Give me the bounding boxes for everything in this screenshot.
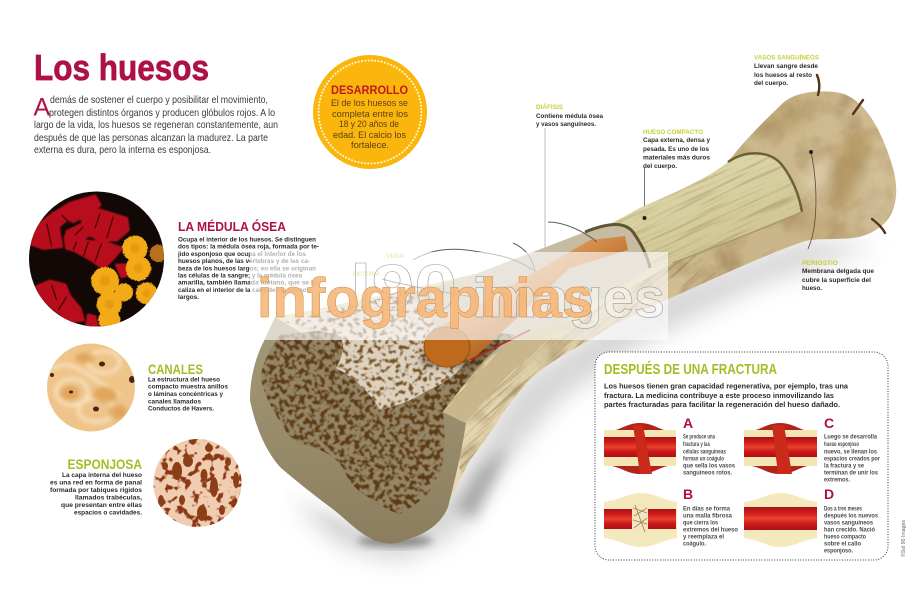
- label: periostio: hueso.: [802, 285, 822, 292]
- panel intro: Los huesos tienen gran capacidad regenerativa, por ejemplo, tras una: [604, 382, 849, 390]
- step C: la fractura y se: [824, 462, 865, 470]
- section: la medula osea: [177, 219, 319, 301]
- blood vessels: vein and artery: [382, 222, 597, 298]
- step B: B: [683, 486, 693, 502]
- intro text block: externa es dura, pero la interna es esponjosa.: [34, 145, 211, 156]
- label: periostio: cubre la superficie del: [802, 277, 871, 284]
- bone outer surface: [250, 91, 896, 542]
- body text: jido esponjoso que ocupa el interior de los: [177, 251, 306, 258]
- label: diafisis: Contiene médula ósea: [536, 113, 603, 120]
- body text: La estructura del hueso: [148, 376, 220, 384]
- step A: forman un coágulo: [683, 456, 724, 462]
- step D: han crecido. Nació: [824, 526, 875, 534]
- step D: sobre el callo: [824, 540, 861, 548]
- bone shadow: [285, 240, 880, 562]
- vessel stubs on bone head: [817, 75, 885, 233]
- label: diafisis: DIÁFISIS: [536, 102, 564, 111]
- step C: espacios creados por: [824, 456, 881, 462]
- diagram D: healed bone: [744, 493, 817, 547]
- watermark: infographias: [257, 266, 593, 329]
- step D: vasos sanguíneos: [824, 520, 874, 526]
- bone texture and head colouring: [448, 92, 892, 476]
- label: hueso compacto: Capa externa, densa y: [643, 137, 710, 144]
- body text: [148, 376, 228, 412]
- label: hueso compacto: [643, 129, 710, 170]
- step A: [683, 415, 736, 476]
- diagram C: new spongy bone: [744, 423, 817, 474]
- label: vasos sanguineos: [754, 52, 820, 87]
- panel intro: fractura. La medicina contribuye a este proceso inmovilizando las: [604, 391, 834, 400]
- body text: La capa interna del hueso: [62, 472, 142, 479]
- step C: [824, 415, 881, 484]
- panel heading: DESPUÉS DE UNA FRACTURA: [604, 361, 777, 378]
- callout: desarrollo: edad. El calcio los: [333, 129, 406, 140]
- hollow medullary canal: [292, 225, 650, 372]
- watermark: l90: [350, 251, 457, 324]
- step D: esponjoso.: [824, 548, 853, 554]
- intro text block: después de que las personas alcanzan la madurez. La parte: [34, 133, 268, 144]
- intro text block: demás de sostener el cuerpo y posibilitar el movimiento,: [50, 95, 268, 106]
- label: periostio: [802, 260, 874, 292]
- cut face: [250, 317, 466, 544]
- cut shadow near marrow: [420, 340, 500, 368]
- title: Los huesos: [34, 47, 209, 88]
- callout: desarrollo: fortalece.: [351, 139, 389, 150]
- label: diafisis: y vasos sanguíneos.: [536, 121, 596, 128]
- intro text block: largo de la vida, los huesos se regeneran constantemente, aun: [34, 120, 278, 131]
- step B: y reemplaza el: [683, 534, 724, 540]
- label: hueso compacto: pesada. Es uno de los: [643, 146, 709, 153]
- spongy bone light area: [286, 294, 467, 410]
- marrow tube: [424, 236, 628, 367]
- step C: extremos.: [824, 476, 850, 484]
- step B: que cierra los: [683, 520, 718, 526]
- step B: En días se forma: [683, 506, 731, 512]
- image credit: ©Sol 90 Images: [900, 519, 907, 557]
- callout: desarrollo: completa entre los: [332, 108, 408, 119]
- watermark: images: [472, 266, 665, 329]
- section: canales: [148, 362, 228, 412]
- body text: que presentan entre ellas: [61, 502, 142, 509]
- compact bone plane: [443, 318, 590, 423]
- body text: espacios o cavidades.: [74, 510, 142, 516]
- drop cap: A: [34, 94, 50, 122]
- body text: formada por tabiques rígidos: [50, 487, 142, 494]
- step A: Se produce una: [683, 434, 715, 440]
- leader: periostio: [808, 150, 816, 249]
- step A: que sella los vasos: [683, 462, 736, 470]
- photo: bone marrow circle: [29, 192, 167, 331]
- label: arteria: ARTERIA: [352, 272, 381, 278]
- body text: es una red en forma de panal: [50, 480, 142, 486]
- panel: despues de una fractura: [595, 352, 888, 560]
- heading: ESPONJOSA: [68, 457, 142, 472]
- panel intro: [604, 382, 849, 409]
- step B: extremos del hueso: [683, 526, 738, 534]
- label: hueso compacto: materiales más duros: [643, 154, 710, 162]
- intro text block: [34, 94, 278, 156]
- label: periostio: Membrana delgada que: [802, 268, 874, 275]
- label: hueso compacto: del cuerpo.: [643, 163, 677, 170]
- body text: Conductos de Havers.: [148, 406, 214, 412]
- compact bone rim: [728, 153, 802, 212]
- photo: spongy bone circle: [153, 438, 242, 528]
- callout: desarrollo: El de los huesos se: [331, 97, 408, 108]
- step D: Dos a tres meses: [824, 506, 862, 512]
- label: vasos sanguineos: los huesos al resto: [754, 72, 812, 79]
- body text: llamados trabéculas,: [75, 494, 142, 502]
- marker: hueso compacto: [642, 216, 646, 220]
- panel intro: partes fracturadas para facilitar la regeneración del hueso dañado.: [604, 400, 840, 409]
- body text: caliza en el interior de la caña de los huesos: [178, 287, 310, 294]
- step A: sanguíneos rotos.: [683, 470, 732, 476]
- body text: [177, 236, 319, 301]
- illustration: bone cross-section: [250, 74, 896, 544]
- step D: después los nuevos: [824, 512, 878, 520]
- spongy bone dark area: [261, 326, 514, 514]
- body text: beza de los huesos largos; en ella se originan: [178, 265, 316, 272]
- step D: [824, 486, 878, 554]
- photo: haversian canals circle: [47, 344, 135, 432]
- body text: [50, 472, 142, 516]
- body text: o láminas concéntricas y: [148, 391, 223, 398]
- intro text block: protegen distintos órganos y producen glóbulos rojos. A lo: [49, 108, 275, 119]
- step C: terminan de unir los: [824, 470, 879, 476]
- watermark: [250, 251, 668, 340]
- lower compact wall: [510, 263, 673, 345]
- label: hueso compacto: HUESO COMPACTO: [643, 129, 703, 136]
- label: vena: VENA: [386, 254, 405, 260]
- body text: compacto muestra anillos: [148, 384, 228, 391]
- callout: desarrollo: [313, 55, 427, 169]
- callout: desarrollo: 18 y 20 años de: [339, 118, 399, 129]
- step C: Luego se desarrolla: [824, 434, 877, 440]
- label: vasos sanguineos: VASOS SANGUÍNEOS: [754, 52, 820, 62]
- body text: canales llamados: [148, 398, 201, 405]
- diagram B: fibrous mesh: [604, 493, 677, 547]
- body text: largos.: [178, 294, 199, 301]
- step C: C: [824, 415, 834, 431]
- step D: D: [824, 486, 834, 502]
- body text: las células de la sangre; y la médula ósea: [178, 272, 302, 280]
- diagram A: clot: [604, 423, 676, 474]
- section: esponjosa: [50, 457, 142, 516]
- compact bone shaft: [337, 154, 800, 338]
- heading: LA MÉDULA ÓSEA: [178, 219, 286, 234]
- step B: coágulo.: [683, 540, 706, 548]
- step B: una malla fibrosa: [683, 512, 733, 520]
- step D: hueso compacto: [824, 534, 866, 540]
- step C: nuevo, se llenan los: [824, 448, 877, 456]
- label: vasos sanguineos: Llevan sangre desde: [754, 63, 818, 70]
- step A: A: [683, 415, 693, 431]
- body text: amarilla, también llamada tuétano, que se lo-: [178, 280, 319, 287]
- step A: células sanguíneas: [683, 448, 726, 456]
- step B: [683, 486, 738, 548]
- body text: Ocupa el interior de los huesos. Se distinguen: [178, 236, 316, 244]
- body text: dos tipos: la médula ósea roja, formada por te-: [178, 244, 319, 251]
- body text: huesos planos, de las vértebras y de las ca-: [178, 258, 310, 265]
- step C: hueso esponjoso: [824, 441, 859, 448]
- label: diafisis: [536, 102, 603, 128]
- step A: fractura y las: [683, 441, 710, 448]
- leader lines: [545, 128, 644, 277]
- heading: CANALES: [148, 362, 203, 377]
- label: vasos sanguineos: del cuerpo.: [754, 80, 788, 87]
- callout: desarrollo: DESARROLLO: [331, 83, 408, 97]
- label: periostio: PERIOSTIO: [802, 260, 838, 267]
